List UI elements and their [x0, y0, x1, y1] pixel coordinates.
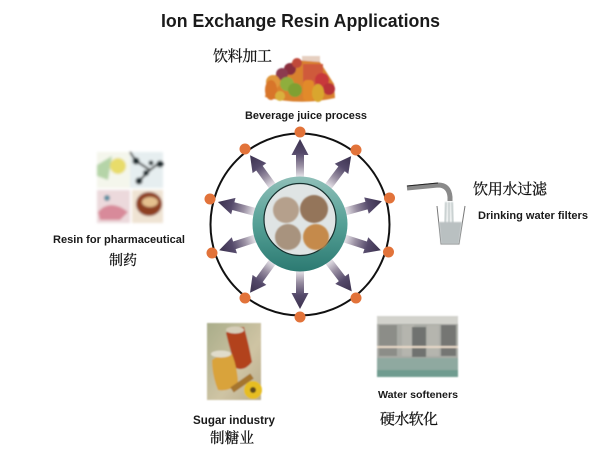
label: drinking water English: Drinking water filters	[478, 210, 588, 222]
teal ring	[252, 176, 348, 272]
label: beverage English: Beverage juice process	[245, 110, 367, 122]
label: drinking water Chinese: 饮用水过滤	[473, 181, 548, 198]
icon: fruit and juice	[265, 56, 335, 102]
diagram: central resin hub	[204, 126, 395, 322]
label: sugar Chinese: 制糖业	[210, 429, 254, 447]
icon: honey jars	[207, 323, 262, 400]
radiating arrows	[216, 139, 384, 309]
label: softener Chinese: 硬水软化	[380, 411, 438, 428]
label: sugar English: Sugar industry	[193, 415, 276, 427]
icon: pharmaceutical collage	[97, 152, 164, 223]
resin beads	[273, 195, 329, 250]
title: Ion Exchange Resin Applications	[161, 11, 440, 31]
icon: water softener plant	[377, 316, 458, 377]
label: softener English: Water softeners	[378, 389, 458, 401]
outer ring	[210, 134, 390, 316]
resin dish	[264, 184, 336, 256]
label: pharmaceutical English: Resin for pharmaceutical	[53, 234, 185, 246]
icon: tap and glass of water	[407, 183, 465, 244]
label: beverage Chinese: 饮料加工	[213, 48, 272, 65]
orange nodes	[204, 126, 395, 322]
label: pharmaceutical Chinese: 制药	[109, 253, 137, 269]
